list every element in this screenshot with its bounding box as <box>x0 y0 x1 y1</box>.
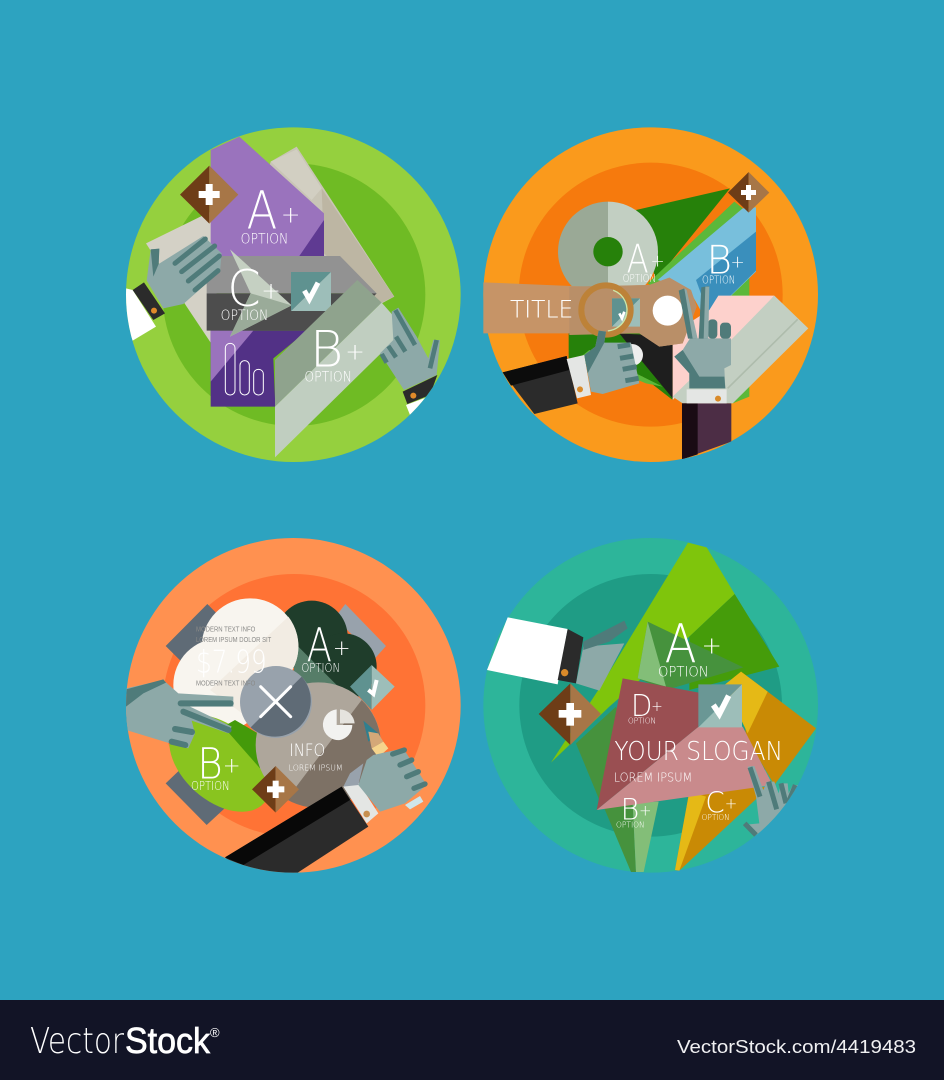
pencil <box>363 721 423 809</box>
label option A: OPTION <box>301 661 340 675</box>
hand with pencil <box>225 748 427 873</box>
small text and price: MODERN TEXT INFO <box>196 680 256 687</box>
black band <box>619 333 673 398</box>
check box icon <box>698 684 742 727</box>
label option A: OPTION <box>658 665 709 681</box>
label A+: A <box>247 181 277 242</box>
label A+: A <box>627 237 649 283</box>
label plus B: + <box>731 253 745 273</box>
label plus A: + <box>333 636 351 661</box>
check box icon <box>291 272 331 311</box>
pie icon <box>621 344 643 366</box>
option B parallelogram <box>275 280 405 457</box>
label B+: B <box>310 321 343 379</box>
bar chart icon <box>225 343 263 395</box>
label plus A: + <box>651 252 665 272</box>
label C+: C <box>227 260 261 318</box>
label option B: OPTION <box>191 779 230 793</box>
footer bar <box>0 1000 944 1080</box>
taupe info bubble <box>256 682 381 808</box>
logo word stock: Stock <box>125 1020 211 1061</box>
title band <box>483 278 697 347</box>
check diamond icon <box>350 665 395 710</box>
label option B: OPTION <box>702 273 735 286</box>
red slogan card <box>597 678 783 810</box>
label B+: B <box>197 740 223 790</box>
panel: coral circle infographic <box>126 538 461 873</box>
label plus D: + <box>651 699 663 715</box>
hand with V sign <box>674 286 731 459</box>
pink and grey folded shape <box>673 296 808 403</box>
panel: orange circle infographic <box>483 127 818 462</box>
green lower kite option B <box>604 802 659 872</box>
hand holding magnifier <box>503 331 639 414</box>
label option C: OPTION <box>221 308 268 324</box>
panel: teal circle infographic <box>483 538 818 873</box>
label C+: C <box>705 786 725 820</box>
white price bubble <box>173 598 298 732</box>
panel: green circle infographic <box>123 127 461 462</box>
mid green triangle option A <box>576 622 743 800</box>
label plus A: + <box>701 631 722 660</box>
magnifier ring <box>579 283 633 337</box>
hand left <box>123 236 222 341</box>
small text and price: MODERN TEXT INFO <box>196 626 256 633</box>
green bubble option B <box>151 696 289 831</box>
label B+: B <box>707 237 732 283</box>
label plus C: + <box>261 276 281 304</box>
registered mark: ® <box>210 1025 220 1040</box>
pointing hand <box>126 679 233 748</box>
gray arrow band option C <box>207 249 377 337</box>
label plus B: + <box>345 338 365 366</box>
gray rectangles <box>166 604 386 825</box>
image url: VectorStock.com/4419483 <box>677 1036 916 1057</box>
label info: INFO <box>289 741 325 760</box>
label B+: B <box>621 792 639 826</box>
brown diamond plus icon <box>252 766 299 813</box>
purple option A shape <box>211 137 324 256</box>
hand right <box>380 308 440 415</box>
label option B: OPTION <box>304 370 352 386</box>
small text and price: LOREM IPSUM DOLOR SIT <box>196 637 272 644</box>
close button <box>240 666 312 738</box>
label title: TITLE <box>510 296 573 324</box>
orange kite option C <box>675 672 816 871</box>
label option B: OPTION <box>616 821 645 830</box>
label plus C: + <box>725 794 737 812</box>
disc chart <box>558 202 658 302</box>
big green kite <box>551 543 779 763</box>
brown diamond plus icon <box>539 683 601 745</box>
label option A: OPTION <box>241 231 288 247</box>
label A+: A <box>665 612 697 675</box>
green triangle <box>569 188 749 403</box>
label A+: A <box>307 618 332 672</box>
small text and price: $7.99 <box>196 645 267 681</box>
label option C: OPTION <box>702 813 730 822</box>
blue option B shape <box>658 207 756 320</box>
pie icon <box>323 709 355 740</box>
label slogan: YOUR SLOGAN <box>614 737 783 767</box>
label plus B: + <box>639 801 652 819</box>
label option D: OPTION <box>628 717 656 726</box>
label plus B: + <box>223 754 241 779</box>
logo word vector: Vector <box>30 1021 124 1062</box>
label plus A: + <box>281 200 300 228</box>
beige paper background <box>146 147 394 343</box>
label lorem ipsum: LOREM IPSUM <box>614 771 692 785</box>
hand bottom right <box>743 766 801 837</box>
small text and price <box>196 626 272 687</box>
brown diamond plus icon <box>728 172 769 213</box>
check box inside magnifier <box>612 298 640 327</box>
label lorem ipsum: LOREM IPSUM <box>289 763 343 773</box>
hand top left <box>487 617 628 691</box>
label option A: OPTION <box>623 272 656 285</box>
label D+: D <box>631 689 652 724</box>
brown diamond plus icon <box>180 166 238 224</box>
dark green cloud option A <box>276 601 377 700</box>
purple lower bar chart card <box>211 331 307 407</box>
